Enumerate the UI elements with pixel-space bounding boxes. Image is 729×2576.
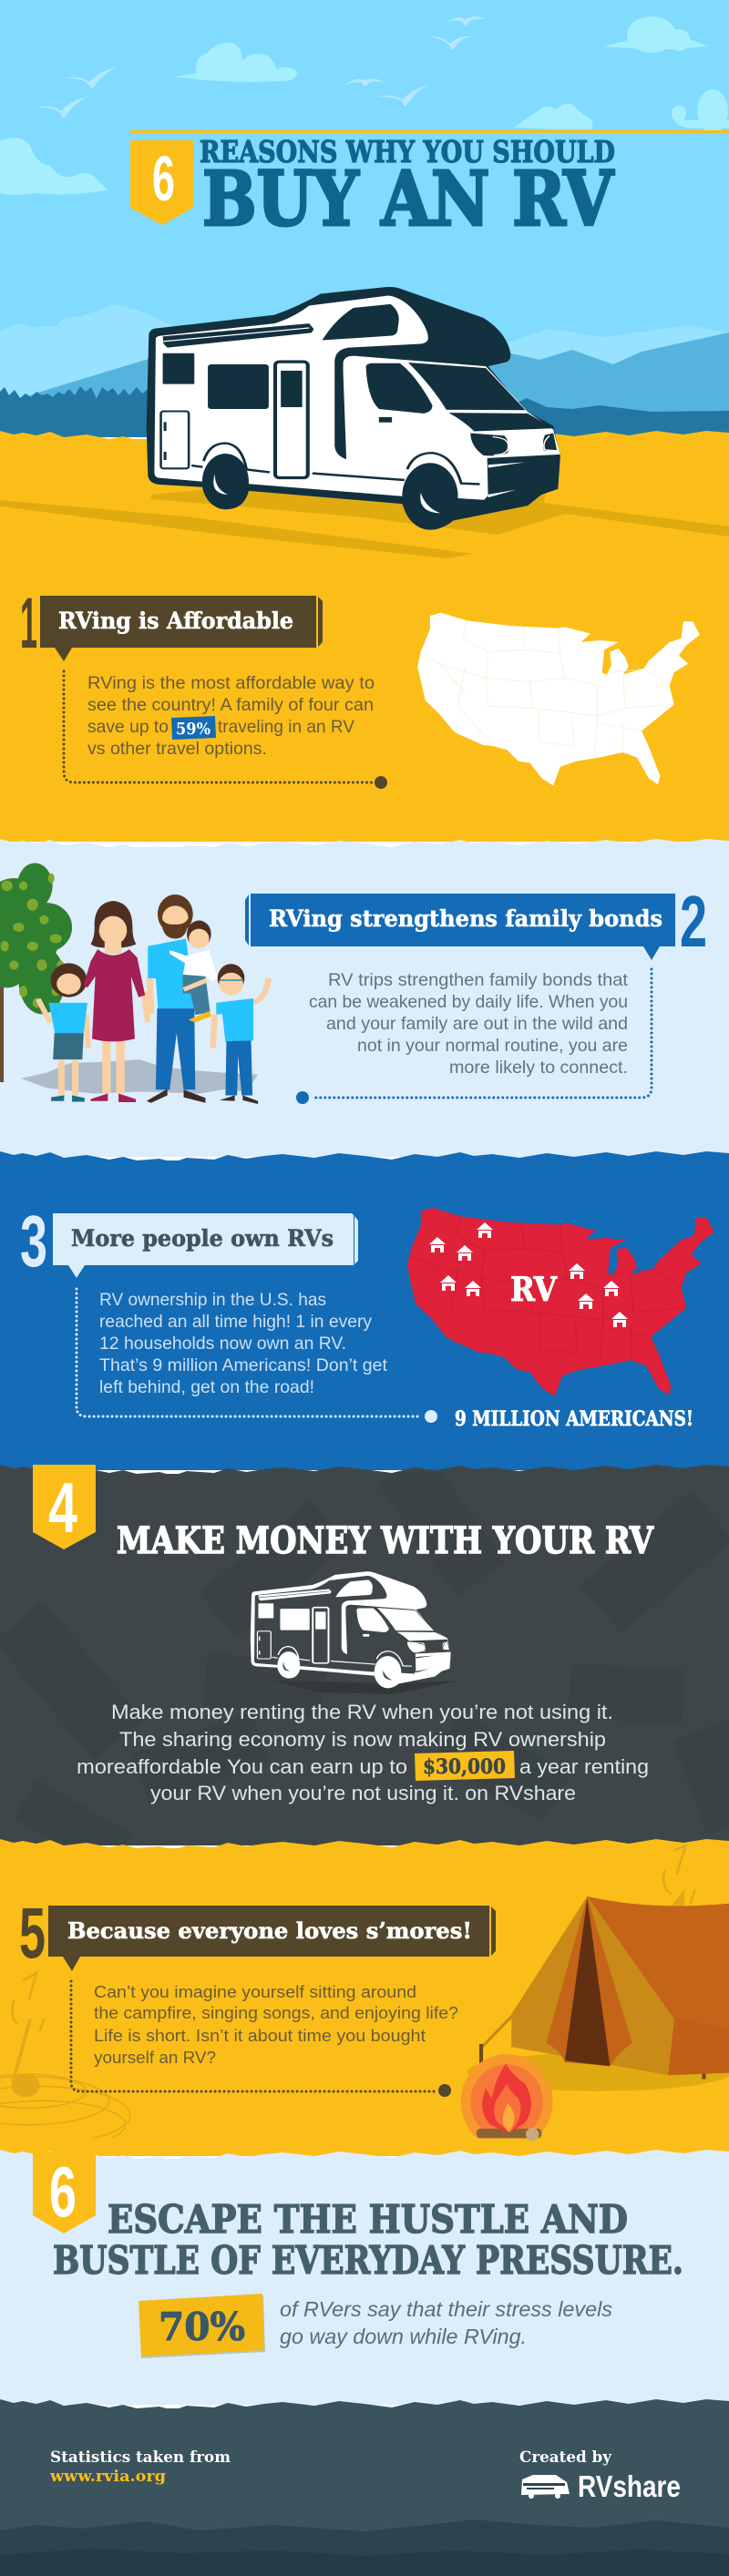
callout: 70% <box>139 2294 265 2358</box>
callout: 59%: 59% <box>176 720 210 739</box>
panel: section 2 family bonds <box>0 839 729 1157</box>
heading: reason 1: RVing is Affordable <box>58 608 293 634</box>
text: reason 2 body: can be weakened by daily life. When you <box>309 992 628 1012</box>
text: reason 3 body: That’s 9 million Americans! Don’t get <box>99 1355 388 1375</box>
text: reason 4 body: your RV when you’re not using it. on RVshare <box>150 1782 576 1804</box>
map: red USA with RV homes: RV <box>510 1271 558 1309</box>
heading: reason 2 <box>245 881 707 962</box>
map: white USA <box>417 613 700 786</box>
text: reason 2 body: more likely to connect. <box>449 1058 628 1078</box>
icon: RV outline <box>251 1571 460 1694</box>
heading: reason 5 <box>19 1892 496 1973</box>
panel: section 3 more people own RVs <box>0 1151 729 1470</box>
text: reason 3 body: RV ownership in the U.S. has <box>99 1290 326 1310</box>
text: reason 1 body: RVing is the most affordable way to <box>87 673 375 693</box>
text: reason 3 body: reached an all time high! 1 in every <box>99 1312 372 1332</box>
title badge <box>130 140 193 225</box>
title badge: 6 <box>152 143 175 214</box>
text: reason 6 body <box>280 2297 612 2348</box>
title: REASONS WHY YOU SHOULD <box>200 134 615 169</box>
badge: 6: 6 <box>49 2152 77 2232</box>
text: reason 3 body: left behind, get on the road! <box>99 1377 314 1397</box>
text: reason 1 body: vs other travel options. <box>87 739 267 759</box>
text: reason 1 body: traveling in an RV <box>218 717 354 737</box>
text: sources: Statistics taken from <box>50 2448 231 2467</box>
text: reason 5 body <box>94 1982 458 2067</box>
dotted connector <box>296 969 652 1104</box>
decoration: mountains and tree line <box>0 304 729 437</box>
heading: reason 3: 3 <box>20 1201 47 1282</box>
decoration: money bills <box>256 1472 519 2095</box>
text: reason 4 body: Make money renting the RV when you’re not using it. <box>111 1701 613 1723</box>
text: reason 1 body: see the country! A family of four can <box>87 695 374 715</box>
decoration: footer mountains <box>0 2520 729 2576</box>
badge: 4: 4 <box>48 1467 77 1548</box>
text: sources: www.rvia.org <box>49 2468 166 2486</box>
heading: reason 3: More people own RVs <box>71 1225 334 1252</box>
panel: section 1 affordable <box>0 287 729 842</box>
text: reason 1 body: save up to <box>87 717 169 737</box>
text: reason 4 body <box>77 1701 649 1804</box>
text: reason 5 body: yourself an RV? <box>94 2048 216 2067</box>
heading: reason 2: RVing strengthens family bonds <box>269 905 662 932</box>
road shadows <box>0 483 729 558</box>
text: sources <box>49 2448 231 2486</box>
girl <box>38 963 88 1102</box>
map: red USA with RV homes <box>407 1208 714 1396</box>
badge: 4 <box>33 1465 96 1549</box>
callout: $30,000: $30,000 <box>423 1755 506 1779</box>
text: reason 1 body <box>87 673 375 759</box>
text: reason 2 body <box>309 970 629 1078</box>
callout: 59% <box>171 716 216 740</box>
icon: clouds <box>0 16 729 195</box>
panel: section 6 escape <box>0 2150 729 2405</box>
panel: section 4 make money <box>0 1450 729 1874</box>
icon: RV illustration <box>147 287 560 530</box>
title: BUY AN RV <box>202 156 614 243</box>
text: reason 4 body: moreaffordable You can earn up to <box>77 1755 407 1778</box>
panel: footer <box>0 2399 729 2576</box>
text: reason 3 body <box>99 1290 388 1397</box>
text: reason 6 body: of RVers say that their stress levels <box>280 2297 612 2321</box>
text: reason 2 body: and your family are out in the wild and <box>326 1014 628 1034</box>
illustration: tree <box>0 864 72 1082</box>
heading: reason 5: Because everyone loves s’mores! <box>67 1917 472 1944</box>
boy <box>213 964 269 1104</box>
panel: section 5 smores <box>0 1839 729 2156</box>
panel: sky header <box>0 0 729 437</box>
man with child <box>147 894 218 1103</box>
heading: reason 6: ESCAPE THE HUSTLE AND <box>108 2197 628 2242</box>
text: reason 3 body: 12 households now own an RV. <box>99 1334 346 1354</box>
heading: reason 1: 1 <box>20 582 37 663</box>
heading: reason 1 <box>20 582 323 663</box>
text: created by: Created by <box>519 2448 612 2467</box>
dotted connector <box>71 1981 451 2097</box>
text: reason 4 body: The sharing economy is now making RV ownership <box>119 1728 606 1751</box>
text: reason 5 body: Can’t you imagine yourself sitting around <box>94 1982 416 2001</box>
text: reason 5 body: the campfire, singing songs, and enjoying life? <box>94 2003 458 2022</box>
heading: reason 3 <box>20 1201 358 1282</box>
title <box>130 130 729 243</box>
dotted connector <box>77 1289 437 1423</box>
callout: 70%: 70% <box>159 2305 245 2349</box>
woman <box>84 901 148 1102</box>
text: reason 6 body: go way down while RVing. <box>280 2325 527 2348</box>
text: reason 5 body: Life is short. Isn’t it about time you bought <box>94 2026 426 2045</box>
illustration: campfire <box>461 2054 553 2150</box>
text: reason 2 body: not in your normal routine, you are <box>357 1036 628 1056</box>
logo: RVshare <box>521 2469 681 2503</box>
heading: reason 6 <box>53 2197 683 2283</box>
logo: RVshare: RVshare <box>578 2469 681 2503</box>
illustration: family <box>21 894 269 1104</box>
decoration: music notes <box>0 1845 695 2149</box>
text: reason 4 body: a year renting <box>519 1755 649 1778</box>
heading: reason 5: 5 <box>19 1892 46 1973</box>
icon: birds <box>36 16 485 118</box>
text: reason 2 body: RV trips strengthen family bonds that <box>328 970 629 990</box>
illustration: tent <box>467 1896 729 2091</box>
heading: reason 2: 2 <box>680 881 707 962</box>
dotted connector <box>64 671 387 789</box>
badge: 6 <box>33 2152 96 2234</box>
